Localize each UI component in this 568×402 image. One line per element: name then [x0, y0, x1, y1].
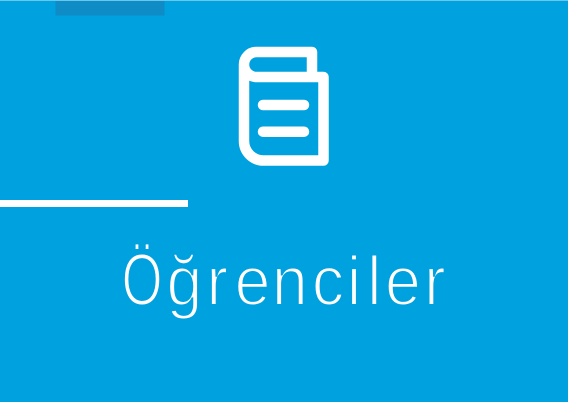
- divider bar: [0, 200, 188, 207]
- top tab: [56, 1, 164, 16]
- icon: book with text lines: [244, 52, 324, 160]
- heading: Öğrenciler: Ö: [122, 240, 162, 321]
- heading: Öğrenciler: ğrenciler: [167, 243, 446, 321]
